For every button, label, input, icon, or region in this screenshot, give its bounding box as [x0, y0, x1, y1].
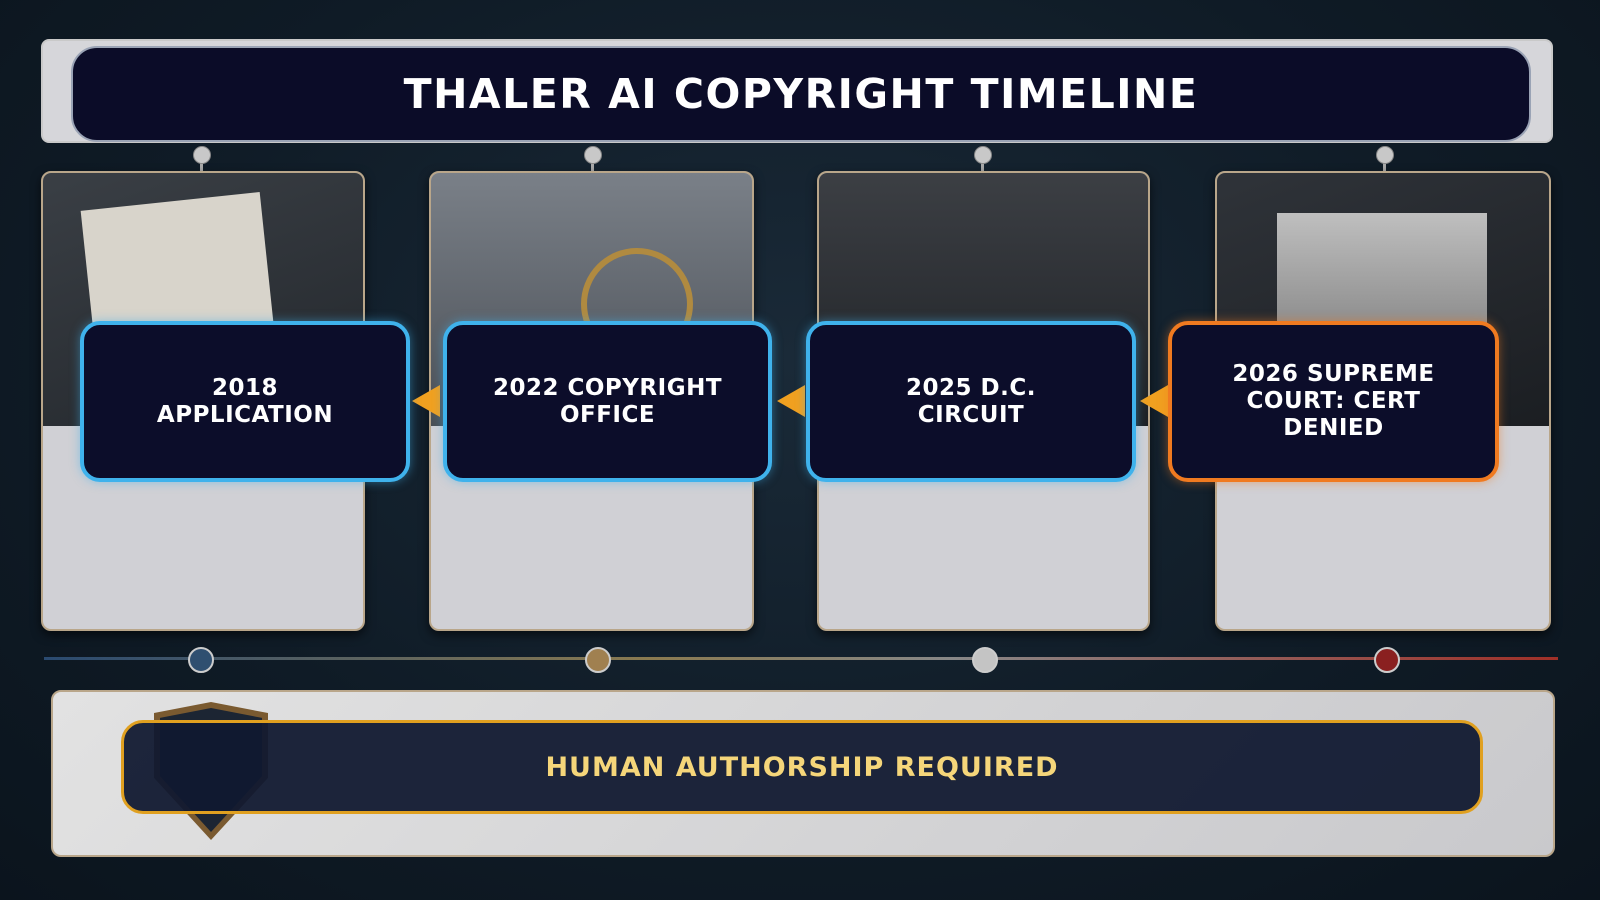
title: THALER AI COPYRIGHT TIMELINE: [404, 70, 1198, 118]
title bar: [71, 46, 1531, 142]
card 4: supreme court: [1215, 171, 1551, 631]
box 2: OFFICE: [560, 402, 655, 428]
card 1: application: [41, 171, 365, 631]
box 3: 2025 D.C.: [906, 374, 1036, 400]
shield icon: [154, 702, 268, 840]
box 3: [806, 321, 1136, 482]
box 2: [443, 321, 772, 482]
box 4: COURT: CERT: [1247, 388, 1420, 414]
callout bar: [121, 720, 1483, 814]
arrows: [412, 385, 440, 417]
header frame: [41, 39, 1553, 143]
box 4: 2026 SUPREME: [1232, 361, 1435, 387]
box 3: CIRCUIT: [918, 402, 1024, 428]
box 4: [1168, 321, 1499, 482]
box 2: 2022 COPYRIGHT: [493, 374, 722, 400]
box 4: DENIED: [1283, 415, 1384, 441]
card 2: copyright office: [429, 171, 754, 631]
box 1: APPLICATION: [157, 402, 333, 428]
bottom panel: [51, 690, 1555, 857]
box 1: 2018: [212, 374, 278, 400]
timeline: [44, 657, 1558, 660]
box 1: [80, 321, 410, 482]
card 3: DC circuit: [817, 171, 1150, 631]
pins: [200, 160, 203, 178]
callout bar: HUMAN AUTHORSHIP REQUIRED: [545, 752, 1059, 782]
